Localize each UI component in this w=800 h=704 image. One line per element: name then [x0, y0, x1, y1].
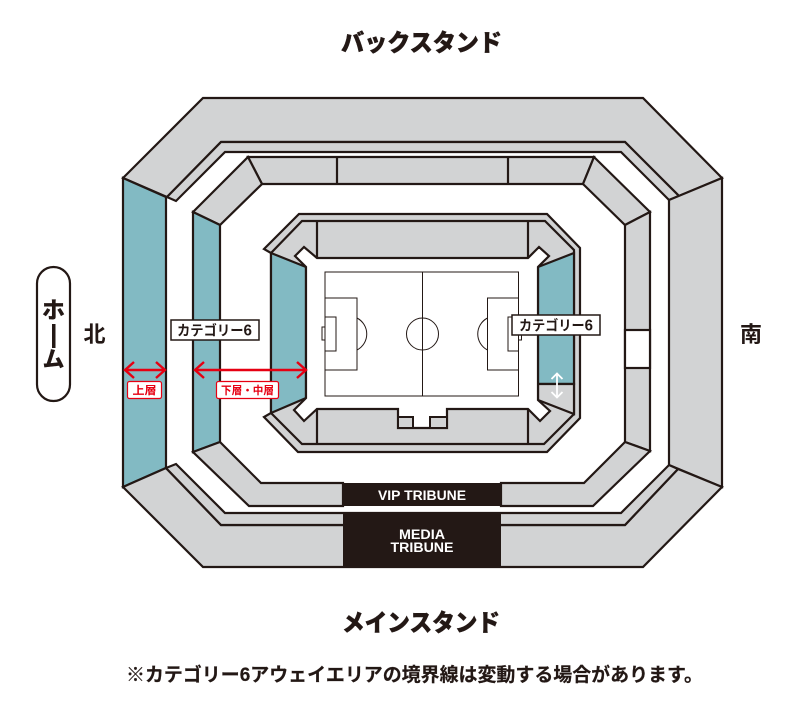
label: south: 南: [740, 322, 762, 347]
lower tier: south grey section: [538, 384, 574, 414]
arrow: white boundary marker: [552, 374, 562, 398]
middle tier seating: [193, 157, 650, 506]
media tribune: TRIBUNE: [390, 540, 454, 555]
upper tier: main thin strip: [166, 464, 678, 525]
upper tier seating: [123, 98, 722, 567]
label: north: 北: [83, 322, 106, 347]
middle tier: north-east corner: [583, 157, 650, 225]
middle tier: main stand left: [193, 442, 343, 506]
upper tier: south block: [669, 178, 722, 487]
middle tier: back stand: [248, 157, 594, 184]
upper tier: back stand band: [123, 98, 722, 197]
footnote: ※カテゴリー6アウェイエリアの境界線は変動する場合があります。: [126, 663, 703, 686]
middle tier: main stand right: [501, 442, 650, 506]
arrow: lower and middle tier width: [195, 362, 306, 378]
media tribune: [343, 513, 501, 567]
label: category 6 north: カテゴリー6: [177, 322, 252, 340]
lower tier seating: [264, 214, 580, 452]
heading: main stand: メインスタンド: [342, 610, 500, 637]
football pitch: [322, 272, 522, 396]
middle tier: south block: [625, 212, 650, 451]
middle tier: north-west corner: [193, 157, 262, 225]
lower tier: outer bowl: [264, 214, 580, 452]
lower tier dividers: [317, 221, 528, 444]
lower tier: south away section: [538, 253, 574, 384]
player bench right: [430, 417, 447, 428]
VIP tribune: [343, 483, 501, 506]
middle tier: south opening: [625, 330, 650, 368]
arrow: upper tier width: [125, 362, 165, 378]
media tribune: MEDIA: [399, 527, 445, 542]
label: upper tier: 上層: [132, 384, 156, 397]
heading: back stand: バックスタンド: [341, 30, 502, 57]
upper tier: back thin strip: [167, 142, 679, 201]
lower tier: north away section: [271, 253, 306, 413]
upper tier: north away section: [123, 178, 166, 487]
home pill: ム: [42, 347, 65, 372]
label: category 6 south: カテゴリー6: [519, 318, 593, 334]
player bench left: [398, 417, 413, 428]
label: lower and middle tier: 下層・中層: [221, 383, 274, 397]
label: upper tier: [128, 382, 162, 398]
home pill: ホ: [42, 297, 65, 323]
upper tier: main stand band: [123, 468, 722, 567]
middle tier: north away section: [193, 212, 220, 452]
label: lower and middle tier: [216, 382, 278, 398]
lower tier: inner ring line: [271, 221, 574, 444]
VIP tribune: VIP TRIBUNE: [378, 488, 466, 503]
pitch surround: [294, 247, 550, 428]
home pill: [37, 267, 70, 401]
